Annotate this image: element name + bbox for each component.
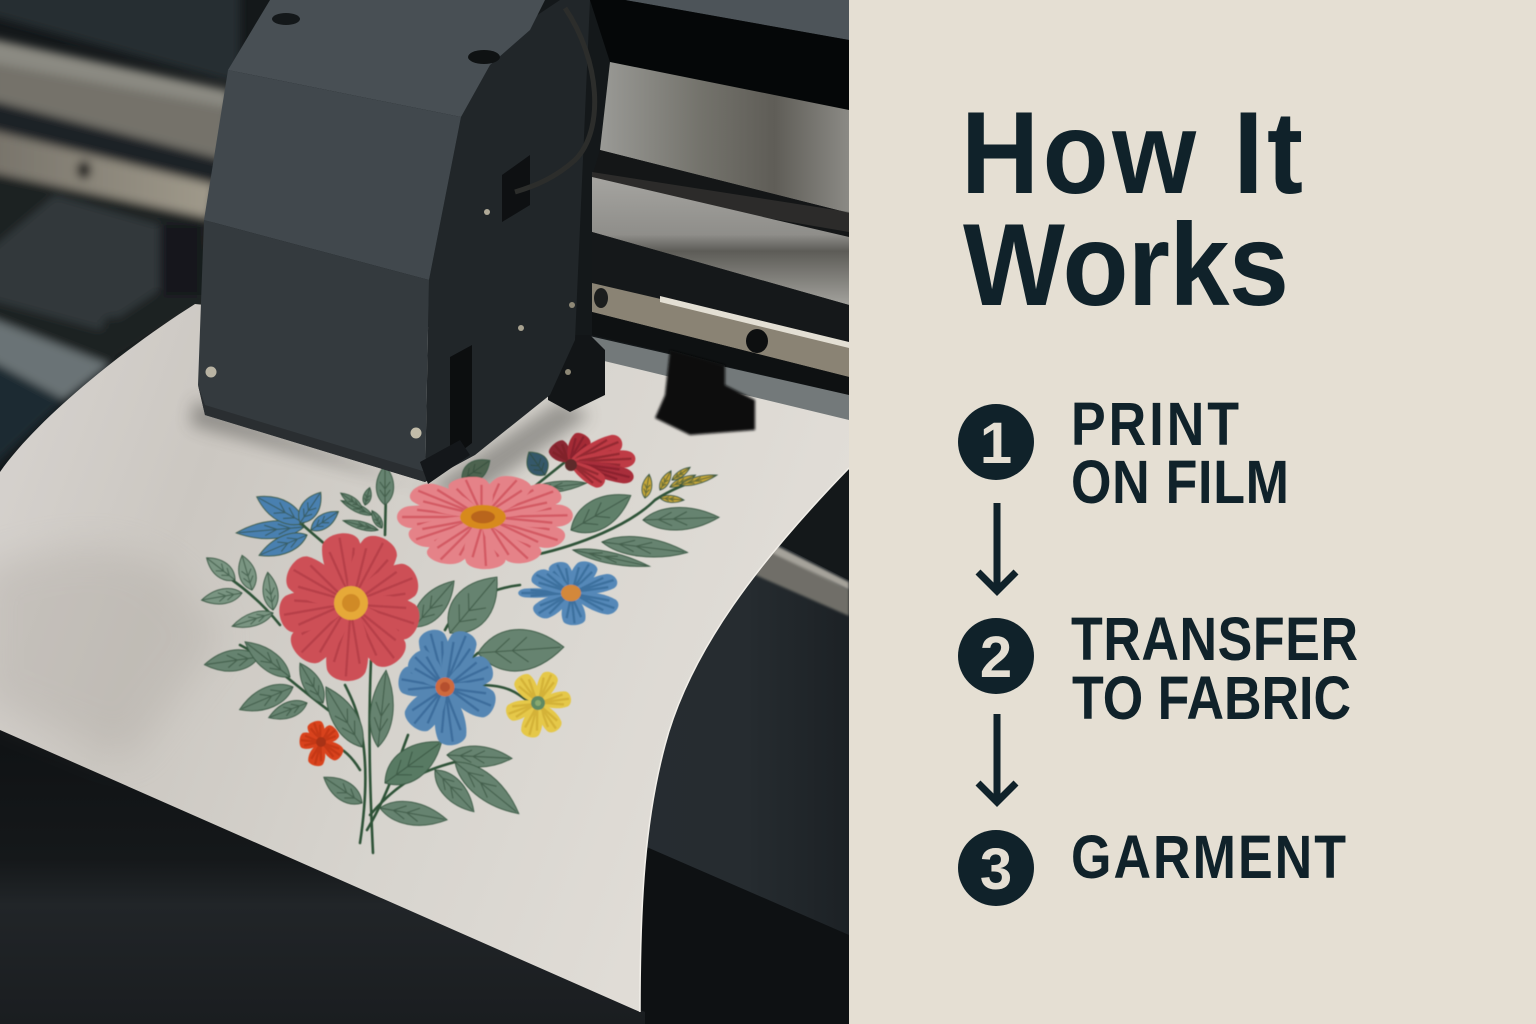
green leaves [200,453,719,831]
panel: how it works steps [849,0,1536,1024]
top chamfer [228,0,545,117]
pink-red large flower [397,472,574,570]
lower front face [198,220,429,482]
blue leaves [236,446,553,563]
stems [225,462,710,853]
right block [548,335,605,412]
big red flower [276,530,424,682]
step 1: ON FILM [1071,448,1289,516]
yellow sprig [640,465,718,504]
step 2: TO FABRIC [1072,664,1351,732]
title: Works [963,199,1289,330]
step 2: TRANSFER [1071,605,1358,673]
slot [450,345,472,460]
cable [515,8,595,192]
upper front face [204,70,461,280]
blue middle flower [396,627,500,747]
step 1: PRINT [1071,390,1239,458]
floral print [200,430,719,853]
side face [425,0,590,482]
top dark red flower [546,430,636,491]
paper film sheet [0,304,849,1012]
yellow flower [504,669,572,740]
printer head [198,0,605,484]
head shadow on paper [190,400,590,500]
step 2 [958,605,1358,732]
title [961,87,1303,330]
panel: printer photo [0,0,849,1024]
background: right steel rails [585,0,849,425]
screws [206,13,575,438]
title: How It [961,87,1303,218]
small red flower [299,719,346,768]
step 3: GARMENT [1071,823,1346,891]
step 1 [958,390,1289,516]
step 2: 2 [980,625,1012,690]
printer feet [655,350,755,435]
step 1: 1 [980,411,1012,476]
right roller [640,460,849,1024]
blue right flower [518,559,622,626]
step 3 [958,823,1346,906]
step 3: 3 [980,837,1012,902]
bottom dark base [0,725,645,1024]
arrow 1 to 2 [978,503,1016,591]
background: blurred left rails [0,0,240,470]
arrow 2 to 3 [978,714,1016,802]
